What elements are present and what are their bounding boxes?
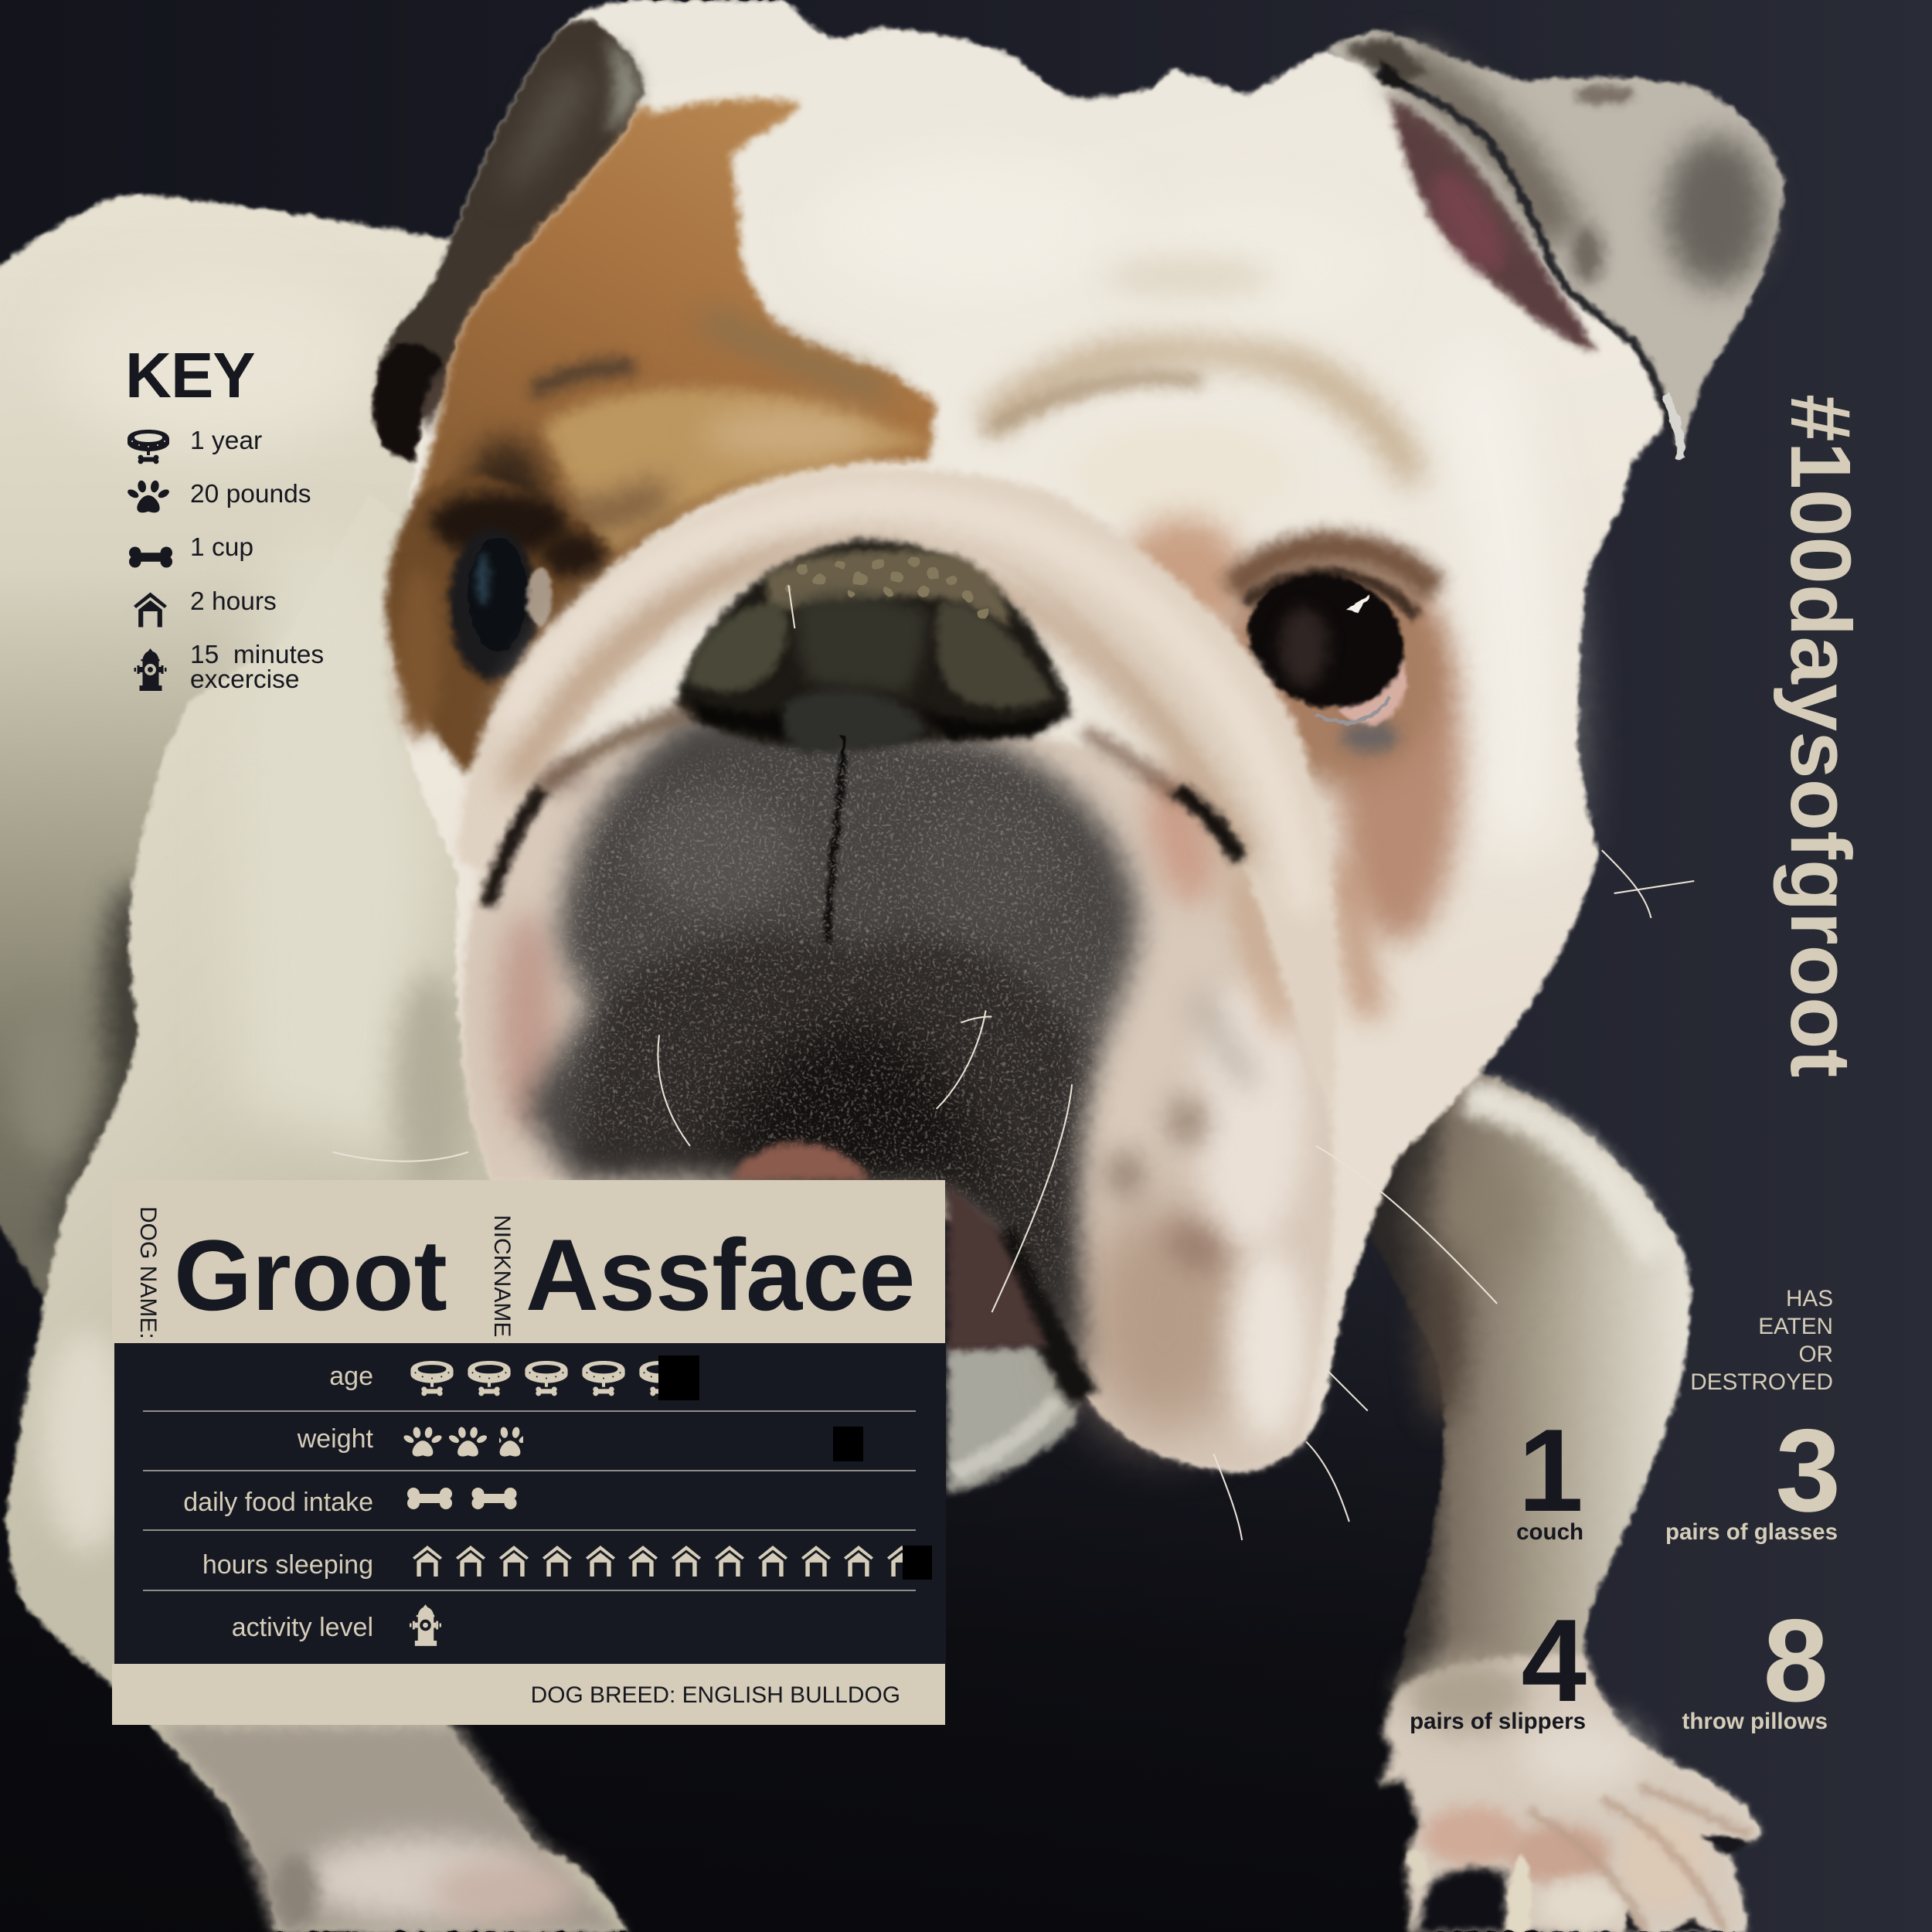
row: age: age [329, 1362, 373, 1391]
callout: has eaten or destroyed: HAS [1786, 1286, 1833, 1311]
stat: 1 couch: couch [1516, 1519, 1583, 1545]
stat: 4 pairs of slippers: 4 [1521, 1595, 1587, 1726]
key item: dog house equals 2 hours [134, 587, 277, 628]
card header band [112, 1180, 945, 1343]
forehead wrinkles and brow [813, 154, 1520, 850]
dog head base [372, 0, 1666, 1471]
callout: has eaten or destroyed: DESTROYED [1690, 1369, 1833, 1395]
paw [1379, 1655, 1760, 1932]
stat: 4 pairs of slippers: pairs of slippers [1410, 1709, 1586, 1734]
row: hours sleeping [202, 1546, 932, 1580]
nose [675, 539, 1072, 758]
key item: paw equals 20 pounds: 20 pounds [190, 480, 311, 509]
left eye with surrounding skin [386, 473, 616, 774]
stat: 1 couch: 1 [1518, 1405, 1583, 1536]
key item: paw equals 20 pounds [126, 480, 311, 512]
overlay graphics [112, 353, 1853, 1733]
key item: dog house equals 2 hours: 2 hours [190, 587, 277, 616]
key item: hydrant equals 15 minutes excercise: excercise [190, 665, 300, 694]
panel: dog profile card [112, 1180, 946, 1725]
key item: hydrant equals 15 minutes excercise: 15 minutes [190, 641, 324, 669]
whiskers and stray hairs [332, 585, 1694, 1540]
callout: has eaten or destroyed: EATEN [1758, 1314, 1833, 1339]
row: hours sleeping: hours sleeping [202, 1550, 373, 1580]
key item: bone equals 1 cup: 1 cup [190, 533, 253, 562]
row: daily food intake [183, 1488, 516, 1517]
stat: 3 pairs of glasses: 3 [1775, 1405, 1841, 1536]
card stats panel [114, 1343, 946, 1664]
card footer band [112, 1664, 945, 1725]
stat: 3 pairs of glasses [1665, 1405, 1841, 1545]
wrinkle rope over the nose [456, 468, 1336, 1109]
dog front leg left [6, 493, 641, 1932]
stat: 8 throw pillows [1682, 1595, 1828, 1734]
brown forehead patch [406, 99, 937, 616]
callout: has eaten or destroyed: OR [1798, 1342, 1833, 1367]
right ear [1327, 32, 1784, 458]
key item: collar equals 1 year: 1 year [190, 427, 262, 455]
stat: 8 throw pillows: throw pillows [1682, 1709, 1828, 1734]
key item: collar equals 1 year [128, 427, 262, 464]
nose bumps [785, 557, 988, 618]
stat: 3 pairs of glasses: pairs of glasses [1665, 1519, 1838, 1545]
row: activity level: activity level [232, 1613, 373, 1642]
callout: has eaten or destroyed [1690, 1286, 1833, 1395]
breed line: DOG BREED: ENGLISH BULLDOG [531, 1682, 900, 1708]
mouth lip and inner mouth [732, 1143, 1049, 1350]
right eye with surrounding skin [1119, 518, 1460, 943]
row: weight [297, 1424, 863, 1461]
dog chest [947, 1343, 1079, 1493]
key heading: KEY [125, 339, 255, 411]
row: daily food intake: daily food intake [183, 1488, 373, 1517]
row: activity level [232, 1604, 441, 1646]
stat: 4 pairs of slippers [1410, 1595, 1587, 1734]
label: dog name: DOG NAME: [135, 1206, 161, 1339]
muzzle fur grain [561, 733, 1112, 1306]
row: weight: weight [297, 1424, 374, 1454]
dog leg right with paw [1355, 1065, 1760, 1932]
row: age [329, 1355, 699, 1400]
row dividers [143, 1411, 916, 1590]
legend: key [125, 339, 324, 694]
key item: bone equals 1 cup [129, 533, 253, 568]
dog torso left [0, 193, 616, 1306]
key item: hydrant equals 15 minutes excercise [134, 641, 324, 694]
dark muzzle [527, 715, 1137, 1399]
mouth fold shadows [488, 713, 1240, 906]
muzzle skin [462, 713, 1374, 1471]
name: Groot: Groot [174, 1219, 447, 1332]
hashtag vertical title: #100daysofgroot [1773, 394, 1868, 1077]
label: nickname: NICKNAME [489, 1215, 515, 1337]
nickname: Assface: Assface [526, 1218, 915, 1332]
stat: 8 throw pillows: 8 [1763, 1595, 1828, 1726]
left ear [372, 19, 643, 461]
